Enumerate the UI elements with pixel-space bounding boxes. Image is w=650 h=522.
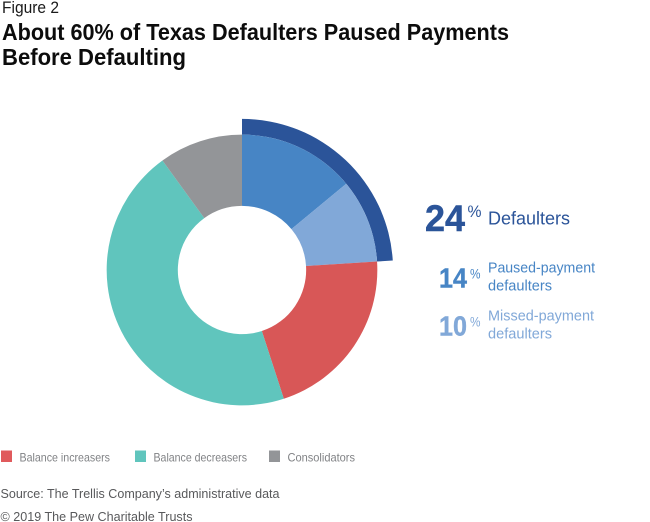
segment: balance decreasers [107,161,284,405]
callout: 14% paused-payment defaulters: 14 [439,262,467,294]
legend [1,450,355,464]
callout: 14% paused-payment defaulters [439,260,596,295]
callout: 10% missed-payment defaulters: 10 [439,311,467,342]
callout: 10% missed-payment defaulters: % [470,315,480,330]
callout: 10% missed-payment defaulters: defaulters [488,326,552,343]
legend item: balance increasers: Balance increasers [20,450,110,464]
callout: 10% missed-payment defaulters: Missed-payment [488,308,595,325]
source note: Source: The Trellis Company’s administrative data [0,486,280,501]
callout: 10% missed-payment defaulters [439,308,595,343]
title: Before Defaulting [2,44,186,70]
segment: balance increasers [262,261,377,399]
segment: missed-payment defaulters [291,184,377,266]
callout: 24% defaulters [425,198,570,239]
callout: 24% defaulters: % [468,202,482,221]
title [2,19,509,70]
callout: 14% paused-payment defaulters: Paused-payment [488,260,596,277]
segment: defaulters outer band [242,119,393,261]
callout: 14% paused-payment defaulters: % [470,266,480,282]
legend item: consolidators: Consolidators [288,450,355,464]
segment: consolidators [162,135,242,218]
donut chart [107,119,393,405]
callout: 14% paused-payment defaulters: defaulters [488,278,552,295]
title: About 60% of Texas Defaulters Paused Payments [2,19,509,45]
callout: 24% defaulters: 24 [425,198,465,239]
callout: 24% defaulters: Defaulters [488,208,570,228]
segment: paused-payment defaulters [242,135,346,229]
legend item: balance decreasers: Balance decreasers [154,450,247,464]
